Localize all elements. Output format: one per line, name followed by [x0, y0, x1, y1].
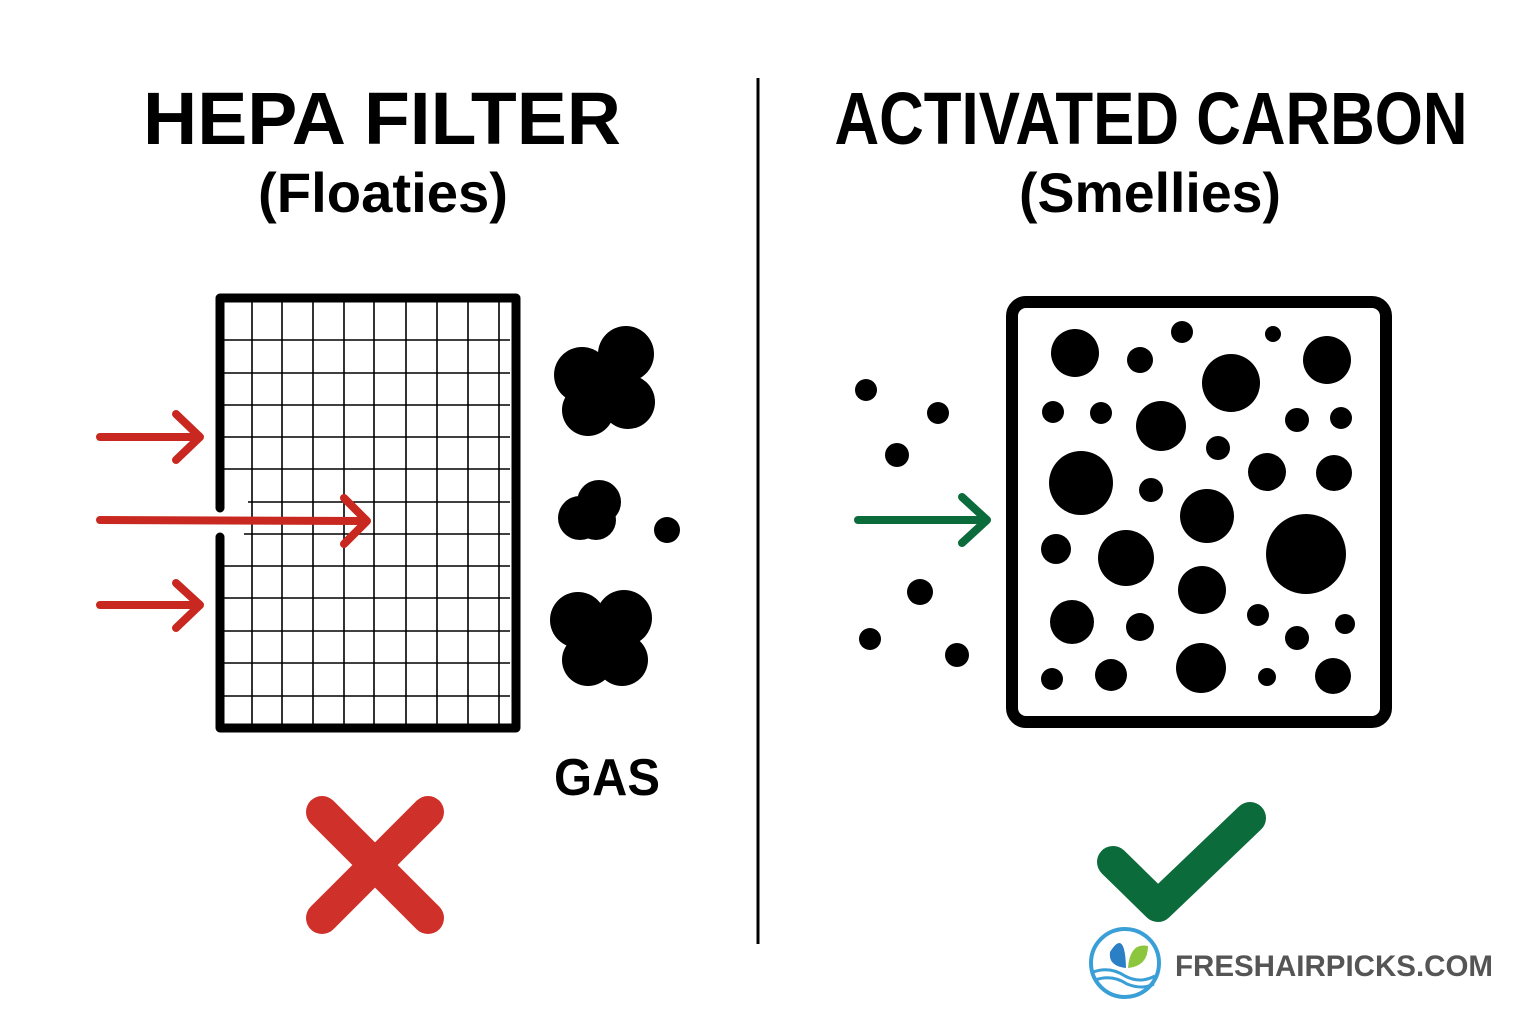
label: GAS: GAS: [554, 749, 660, 807]
title: HEPA FILTER: [143, 77, 621, 224]
icon: green check: [1113, 818, 1250, 906]
title: HEPA FILTER: HEPA FILTER: [143, 77, 621, 160]
logo: [1091, 929, 1493, 997]
activated carbon block: [1012, 302, 1386, 722]
logo: FRESHAIRPICKS.COM: [1175, 950, 1493, 983]
odor particles: [855, 379, 969, 667]
green arrow: [858, 497, 987, 543]
title: ACTIVATED CARBON: [834, 77, 1468, 224]
icon: red X: [322, 812, 428, 918]
red arrows: [100, 414, 367, 628]
HEPA filter grid: [220, 298, 516, 728]
title: HEPA FILTER: (Floaties): [258, 161, 508, 224]
gas blobs: [550, 326, 680, 686]
title: ACTIVATED CARBON: (Smellies): [1019, 161, 1281, 224]
